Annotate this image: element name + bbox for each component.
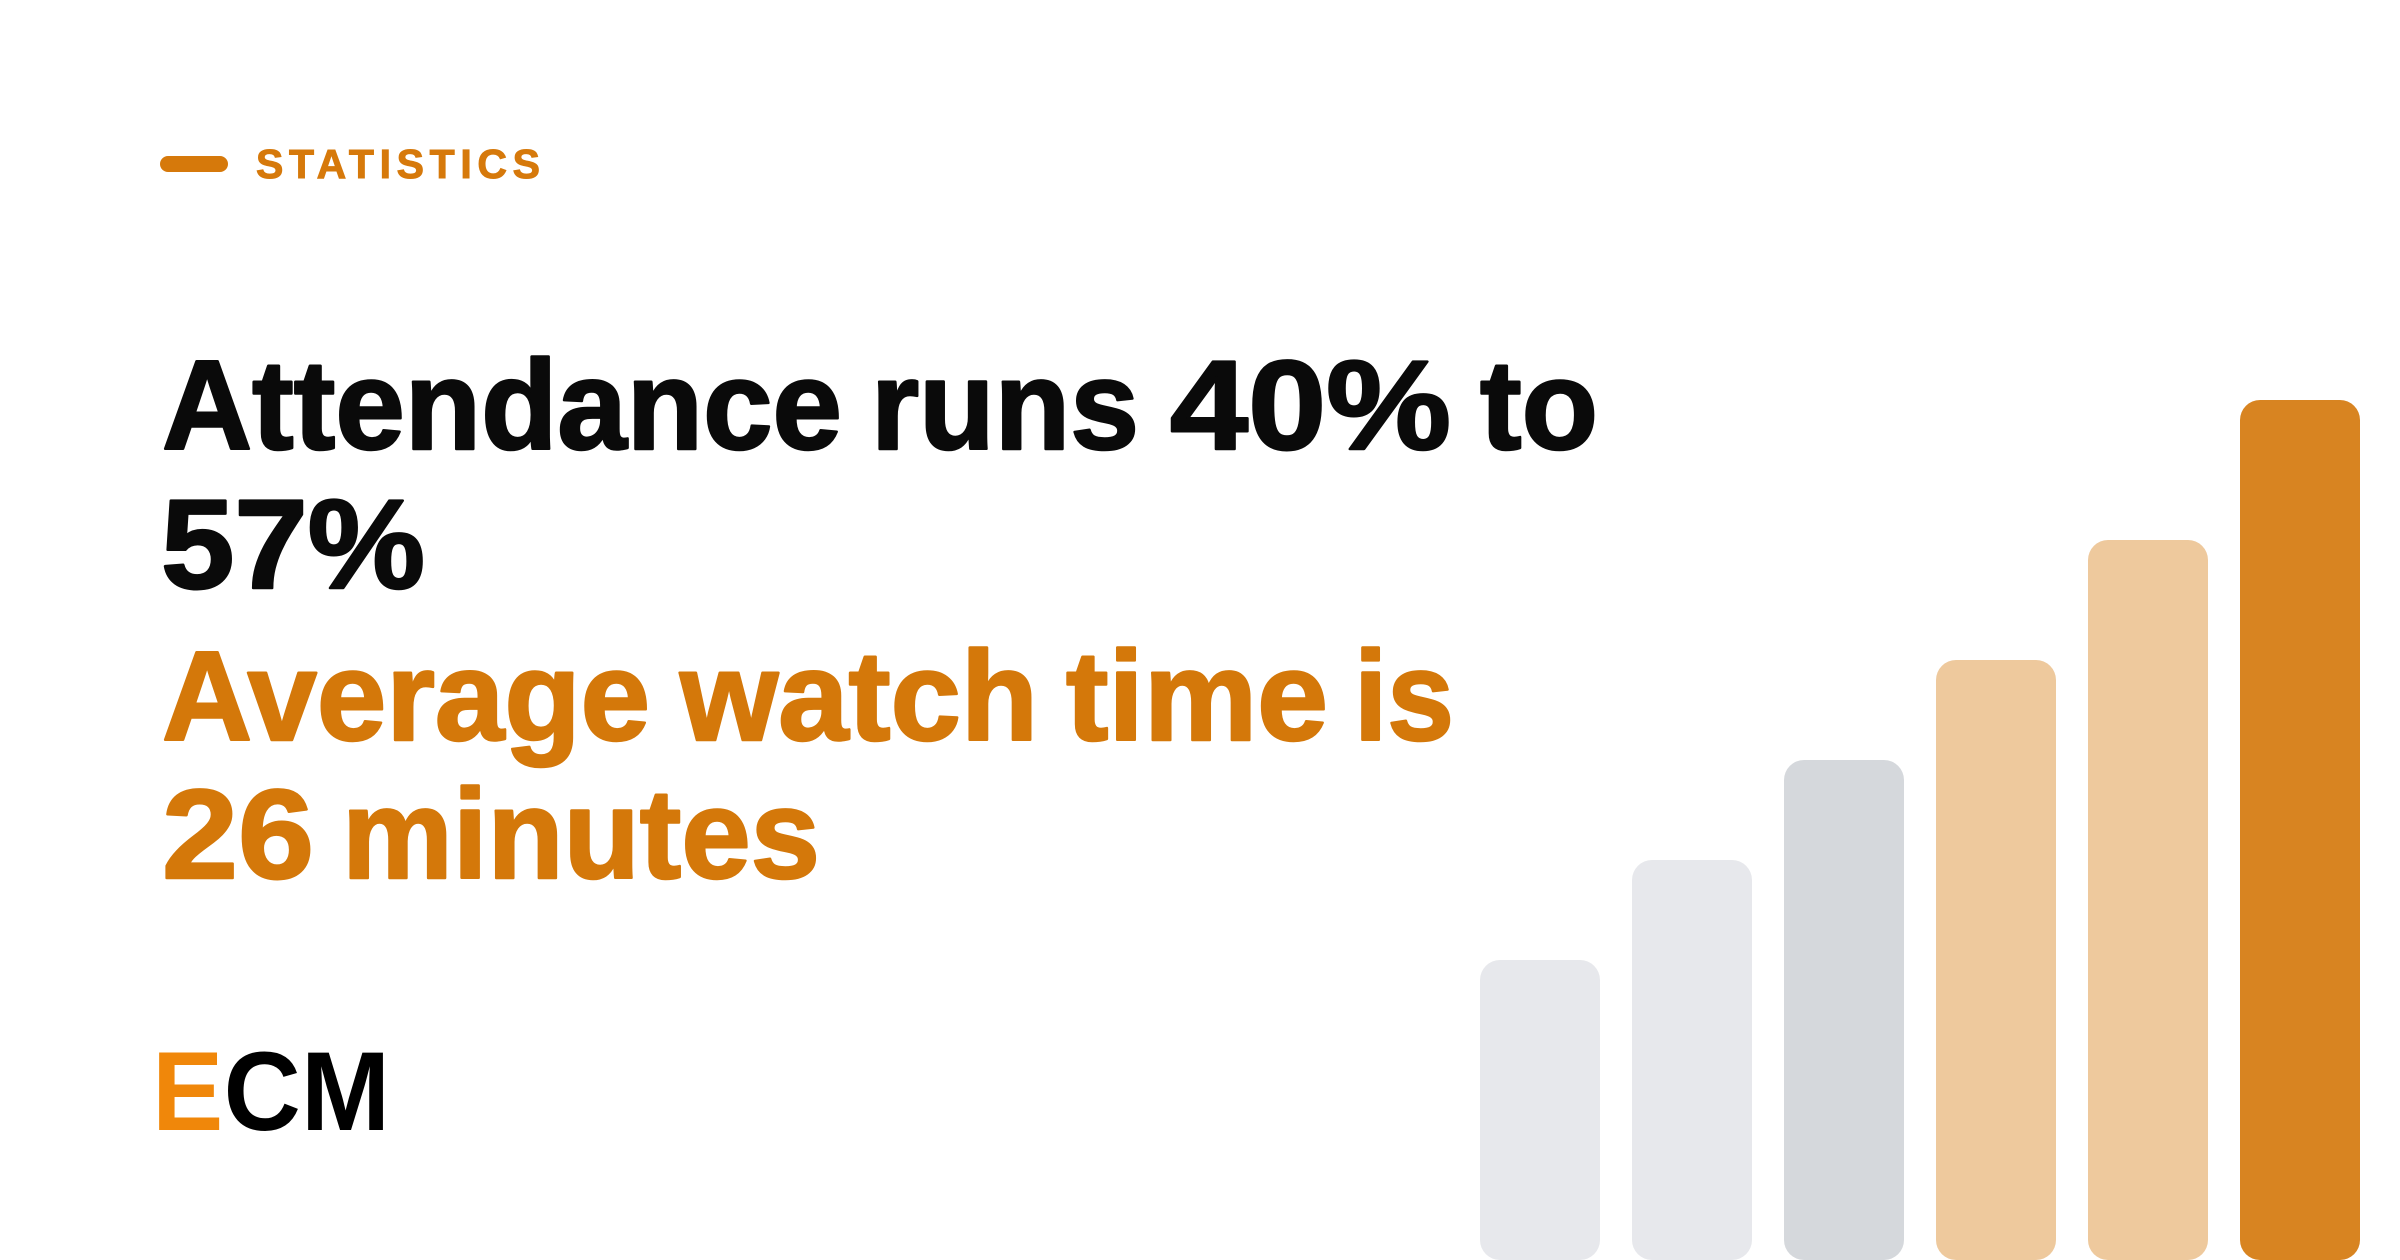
headline statement: attendance: to	[1480, 334, 1598, 476]
headline statement: attendance: 57%	[161, 473, 425, 615]
eyebrow label	[160, 141, 540, 187]
logo: ECM wordmark: M	[301, 1030, 390, 1155]
headline statement: watch time: 26	[162, 763, 314, 905]
logo: ECM wordmark: C	[224, 1030, 301, 1155]
headline statement: watch time: Average	[162, 625, 650, 767]
bar 1	[1480, 960, 1600, 1260]
bar chart: rising bars	[1480, 400, 2360, 1260]
headline statement: watch time: watch	[679, 625, 1038, 767]
headline statement: attendance	[161, 334, 1598, 615]
headline statement: attendance: Attendance	[162, 334, 842, 476]
bar 4	[1936, 660, 2056, 1260]
bar 5	[2088, 540, 2208, 1260]
headline statement: watch time: time	[1066, 625, 1328, 767]
headline statement: watch time	[162, 625, 1454, 905]
logo: ECM wordmark	[152, 1030, 390, 1155]
headline statement: attendance: 40%	[1170, 334, 1451, 476]
headline statement: attendance: runs	[871, 334, 1139, 476]
headline statement: watch time: is	[1354, 625, 1454, 767]
eyebrow text: STATISTICS	[256, 141, 540, 187]
headline	[161, 334, 1598, 905]
eyebrow accent dash	[160, 156, 228, 172]
bar 3	[1784, 760, 1904, 1260]
headline statement: watch time: minutes	[342, 763, 820, 905]
bar 2	[1632, 860, 1752, 1260]
bar 6	[2240, 400, 2360, 1260]
logo: ECM wordmark: E	[152, 1030, 223, 1155]
